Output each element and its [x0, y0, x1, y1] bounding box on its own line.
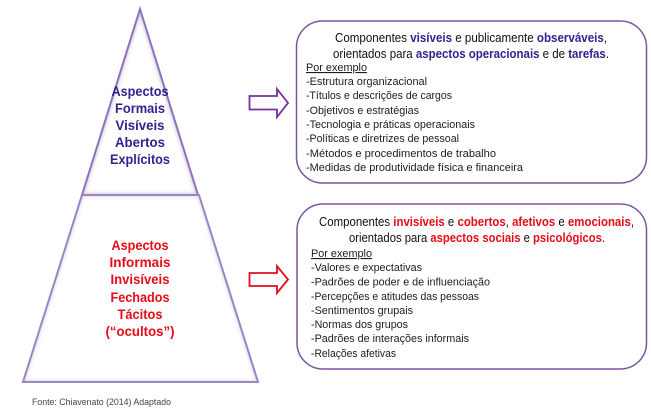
examples list: visible — [306, 62, 524, 174]
panel heading: invisible: orientados para aspectos sociais e psicológicos. — [349, 231, 605, 245]
panel heading: visible: Componentes visíveis e publicamente observáveis, — [335, 31, 607, 45]
examples list: visible: Por exemplo — [306, 62, 367, 74]
examples list: invisible: Por exemplo — [311, 248, 372, 260]
pyramid bottom section — [23, 195, 258, 382]
panel heading: invisible — [319, 215, 634, 245]
pyramid top labels: Aspectos — [112, 84, 168, 99]
panel heading: visible: orientados para aspectos operacionais e de tarefas. — [333, 47, 609, 61]
pyramid top labels: Formais — [115, 101, 165, 116]
examples list: visible: -Métodos e procedimentos de trabalho — [306, 148, 496, 160]
pyramid top labels: Abertos — [115, 135, 165, 150]
examples list: invisible: -Relações afetivas — [311, 348, 396, 360]
panel heading: visible — [333, 31, 609, 61]
examples list: visible: -Objetivos e estratégias — [306, 105, 419, 117]
arrow: purple — [250, 89, 288, 117]
pyramid — [23, 9, 258, 382]
pyramid bottom labels: Informais — [110, 255, 170, 270]
examples list: visible: -Medidas de produtividade física e financeira — [306, 162, 524, 174]
examples list: invisible: -Padrões de poder e de influenciação — [311, 276, 490, 288]
pyramid bottom labels: Fechados — [110, 290, 170, 305]
examples list: invisible: -Percepções e atitudes das pessoas — [311, 291, 479, 303]
pyramid top labels: Explícitos — [110, 152, 170, 167]
examples list: invisible: -Normas dos grupos — [311, 319, 408, 331]
panel heading: invisible: Componentes invisíveis e cobertos, afetivos e emocionais, — [319, 215, 634, 229]
pyramid bottom labels: (“ocultos”) — [106, 324, 174, 339]
arrow: red — [250, 266, 288, 293]
examples list: visible: -Políticas e diretrizes de pessoal — [306, 133, 459, 145]
examples list: visible: -Estrutura organizacional — [306, 76, 427, 88]
examples list: visible: -Tecnologia e práticas operacionais — [306, 119, 475, 131]
examples list: invisible: -Padrões de interações informais — [311, 333, 469, 345]
pyramid bottom labels: Invisíveis — [110, 272, 170, 287]
examples list: invisible: -Sentimentos grupais — [311, 305, 413, 317]
panel: visible components — [296, 21, 646, 183]
pyramid top labels — [110, 84, 170, 167]
examples list: invisible: -Valores e expectativas — [311, 262, 422, 274]
source note: Fonte: Chiavenato (2014) Adaptado — [32, 397, 171, 408]
examples list: invisible — [311, 248, 490, 360]
examples list: visible: -Títulos e descrições de cargos — [306, 90, 452, 102]
pyramid bottom labels: Aspectos — [112, 238, 168, 253]
pyramid top section — [82, 9, 198, 195]
pyramid bottom labels: Tácitos — [118, 307, 162, 322]
panel: invisible components — [297, 204, 646, 369]
pyramid bottom labels — [106, 238, 174, 339]
pyramid top labels: Visíveis — [116, 118, 164, 133]
